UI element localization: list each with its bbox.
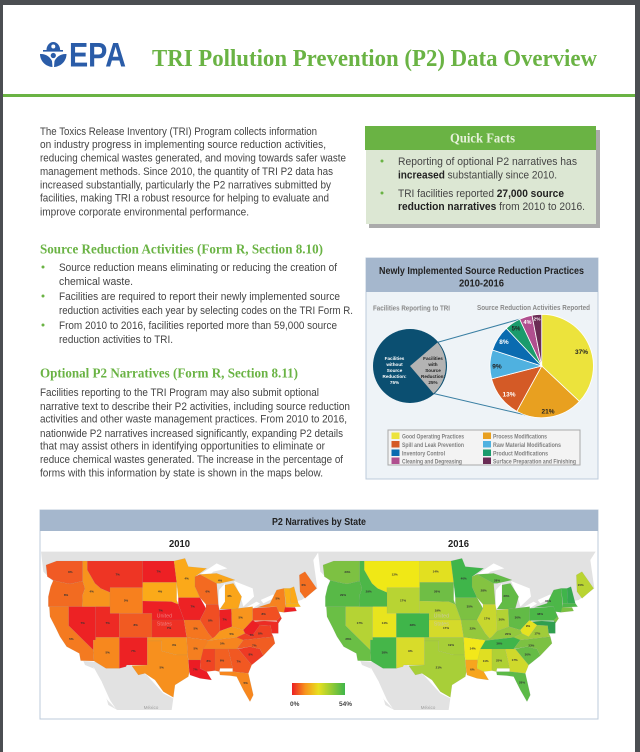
state labels 2016: 17% <box>400 598 406 602</box>
state labels 2016: 9% <box>408 649 413 653</box>
intro text block: increased substantially, particularly the P2 narratives submitted by <box>40 180 331 192</box>
bullet list: source reduction: Source reduction means eliminating or reducing the creation of <box>59 262 338 274</box>
state labels 2010: 4% <box>158 589 162 593</box>
state labels 2010: 5% <box>69 637 74 641</box>
bullet list: source reduction: reduction activities to TRI. <box>59 334 173 346</box>
state labels 2016: 17% <box>512 658 518 662</box>
state labels 2016: 29% <box>366 590 372 594</box>
text block: optional P2 narratives: activities and other waste management practices. From 2010 to 2016, <box>40 414 347 426</box>
map: 2016: States <box>434 621 449 627</box>
state labels 2016: 30% <box>503 594 510 598</box>
state labels 2016: 31% <box>545 599 551 603</box>
pie labels: 37% <box>575 349 588 356</box>
state labels 2010: 5% <box>194 646 198 650</box>
pie labels <box>492 316 588 416</box>
pie labels: 9% <box>492 364 502 370</box>
connector lines <box>434 318 530 416</box>
chart legend: Inventory Control <box>402 450 445 458</box>
text block: optional P2 narratives: Facilities reporting to the TRI Program may also submit optional <box>40 387 319 399</box>
title: TRI Pollution Prevention (P2) Data Overview <box>152 46 598 72</box>
text block: optional P2 narratives <box>40 387 350 480</box>
subheading: facilities: Facilities Reporting to TRI <box>373 306 450 312</box>
pie labels: 8% <box>499 339 509 346</box>
state labels 2010: 7% <box>131 649 136 653</box>
state labels 2010: 7% <box>191 605 195 609</box>
chart legend <box>388 430 580 466</box>
intro text block: improve corporate environmental performance. <box>40 206 249 218</box>
heading: optional P2 narratives: Optional P2 Narratives (Form R, Section 8.11) <box>40 366 298 380</box>
pie labels: 4% <box>524 320 532 326</box>
chart legend: Cleaning and Degreasing <box>402 458 462 466</box>
state labels 2016: 20% <box>499 618 505 622</box>
text block: optional P2 narratives: nationwide P2 narratives increased significantly, expanding P2 details <box>40 428 343 440</box>
year label 2016: 2016 <box>448 538 469 550</box>
state labels 2010: 7% <box>159 608 163 612</box>
panel: quick facts: TRI facilities reported 27,000 source <box>398 188 564 200</box>
chart legend: Spill and Leak Prevention <box>402 442 464 449</box>
intro text block: on industry progress in implementing source reduction activities, <box>40 139 326 151</box>
state labels 2016: 17% <box>357 621 363 625</box>
heading: source reduction activities: Source Reduction Activities (Form R, Section 8.10) <box>40 242 323 256</box>
state labels 2016: 38% <box>382 650 388 654</box>
pie labels: 5% <box>512 326 521 332</box>
state labels 2010: 8% <box>258 632 263 636</box>
pie: facilities: Reduction: <box>421 374 445 379</box>
panel: quick facts: Quick Facts <box>450 132 515 146</box>
state labels 2016: 17% <box>484 616 490 620</box>
map: 2010: States <box>157 621 172 627</box>
subheading: activities: Source Reduction Activities Reported <box>477 305 590 312</box>
bullet list: source reduction: Facilities are required to report their newly implemented source <box>59 291 340 303</box>
state labels 2010: 7% <box>157 569 161 573</box>
state labels 2016: 19% <box>435 608 441 612</box>
intro text block: management methods. Since 2010, the quantity of TRI P2 data has <box>40 166 333 178</box>
panel: quick facts <box>365 126 600 228</box>
state labels 2016: 9% <box>526 624 530 628</box>
chart legend: Product Modifications <box>493 450 548 458</box>
map colour legend <box>290 683 352 708</box>
chart title: 2010-2016 <box>459 278 504 290</box>
intro text block: The Toxics Release Inventory (TRI) Program collects information <box>40 126 317 138</box>
state labels 2010: 8% <box>64 593 68 597</box>
pie: facilities: 25% <box>428 380 438 385</box>
state labels 2010: 7% <box>167 626 171 630</box>
state labels 2010: 8% <box>262 612 266 616</box>
pie: facilities: 75% <box>390 380 399 385</box>
state labels 2010: 5% <box>239 615 243 619</box>
chart legend: Raw Material Modifications <box>493 442 561 449</box>
state labels 2016: 29% <box>340 593 346 597</box>
state labels 2010: 5% <box>124 598 128 602</box>
pie labels: 13% <box>502 392 516 398</box>
pie: facilities: without <box>385 362 403 367</box>
state labels 2016: 40% <box>461 577 467 581</box>
state labels 2016: 30% <box>525 652 531 656</box>
pie labels: 21% <box>541 408 555 416</box>
state labels 2016: 11% <box>483 659 489 663</box>
state labels 2010: 8% <box>207 659 211 663</box>
state labels 2010: 7% <box>81 621 85 625</box>
panel: P2 narratives by state <box>40 510 598 719</box>
state labels 2016: 22% <box>470 627 476 631</box>
pie: facilities: Facilities <box>423 356 443 361</box>
state labels 2010: 7% <box>106 621 110 625</box>
state labels 2016: 26% <box>345 637 352 641</box>
state labels 2016: 12% <box>392 572 398 576</box>
chart legend: Good Operating Practices <box>402 434 464 440</box>
state labels 2010: 6% <box>301 583 306 587</box>
pie: activities <box>490 314 593 418</box>
state labels 2016: 28% <box>494 578 500 582</box>
panel: quick facts: Reporting of optional P2 narratives has <box>398 156 577 168</box>
state labels 2016: 38% <box>537 612 543 616</box>
text block: optional P2 narratives: that may assist others in identifying opportunities to eliminate or <box>40 440 325 452</box>
intro text block: facilities, making TRI a robust resource for helping to evaluate and <box>40 192 329 204</box>
pie labels: 2% <box>534 316 541 322</box>
state labels 2010: 5% <box>244 681 248 685</box>
map: 2016: United <box>434 614 449 620</box>
state labels 2010: 8% <box>249 652 253 656</box>
state labels 2016: 38% <box>410 623 416 627</box>
map: 2016: México <box>421 705 436 710</box>
state labels 2010: 7% <box>116 572 120 576</box>
state labels 2016: 15% <box>578 583 584 587</box>
state labels 2016: 14% <box>433 569 439 573</box>
map: 2010: México <box>144 705 159 710</box>
logo: EPA: EPA <box>69 36 126 74</box>
pie: facilities: Source <box>425 368 441 373</box>
text block: optional P2 narratives: reduce chemical wastes generated. The increase in the percentage of <box>40 454 344 466</box>
state labels 2016: 33% <box>344 570 351 574</box>
state labels 2010: 4% <box>227 594 232 598</box>
text block: optional P2 narratives: narrative text to describe their P2 activities, including source reduction <box>40 401 350 413</box>
state labels 2010: 8% <box>134 623 138 627</box>
state labels 2016: 30% <box>515 615 521 619</box>
state labels 2010: 6% <box>220 658 224 662</box>
map: 2016 <box>318 552 596 710</box>
state labels 2016: 36% <box>496 642 503 646</box>
state labels 2010: 5% <box>194 627 198 631</box>
state labels 2010: 5% <box>220 642 225 646</box>
state labels 2010: 7% <box>223 618 227 622</box>
state labels 2016: 35% <box>467 605 473 609</box>
state labels 2010: 8% <box>208 619 213 623</box>
state labels 2016: 17% <box>534 632 541 636</box>
state labels 2010: 8% <box>68 570 73 574</box>
state labels 2010 <box>64 569 306 685</box>
state labels 2010: 7% <box>250 633 254 637</box>
state labels 2016: 25% <box>496 658 502 662</box>
state labels 2010: 7% <box>193 668 198 672</box>
state labels 2010: 5% <box>160 665 164 669</box>
state labels 2016: 26% <box>434 589 440 593</box>
text block: optional P2 narratives: forms with this information by state is shown in the maps below. <box>40 468 323 480</box>
chart title: Newly Implemented Source Reduction Practices <box>379 265 584 277</box>
panel: source reduction chart <box>366 258 598 479</box>
state labels 2010: 4% <box>185 577 189 581</box>
state labels 2010: 4% <box>172 643 176 647</box>
state labels 2016 <box>340 569 584 684</box>
bullet list: source reduction: chemical waste. <box>59 276 133 288</box>
bullet list: source reduction <box>42 262 353 346</box>
state labels 2010: 5% <box>230 632 234 636</box>
map: 2010 <box>41 552 319 710</box>
map colour legend: 0% <box>290 701 300 708</box>
state labels 2016: 20% <box>505 632 511 636</box>
states 2010 <box>46 558 317 702</box>
bullet list: source reduction: reduction activities each year by selecting codes on the TRI Form R. <box>59 305 353 317</box>
pie: facilities <box>373 329 447 403</box>
state labels 2016: 14% <box>382 621 388 625</box>
map colour legend: 54% <box>339 701 352 708</box>
intro text block: reducing chemical wastes generated, and moving towards safer waste <box>40 152 346 164</box>
state labels 2016: 19% <box>448 643 454 647</box>
chart legend: Process Modifications <box>493 434 547 440</box>
state labels 2016: 17% <box>443 626 449 630</box>
bullet list: source reduction: From 2010 to 2016, facilities reported more than 59,000 source <box>59 320 337 332</box>
states 2016 <box>323 558 594 702</box>
state labels 2016: 21% <box>436 665 442 669</box>
state labels 2010: 7% <box>252 643 257 647</box>
state labels 2010: 5% <box>106 650 110 654</box>
state labels 2016: 28% <box>519 680 525 684</box>
state labels 2010: 5% <box>276 596 280 600</box>
pie: facilities: Reduction: <box>382 374 407 379</box>
state labels 2016: 33% <box>528 643 535 647</box>
state labels 2016: 14% <box>470 646 476 650</box>
state labels 2016: 6% <box>470 668 475 672</box>
state labels 2010: 4% <box>218 578 222 582</box>
panel title: P2 Narratives by State <box>272 517 366 528</box>
state labels 2016: 28% <box>481 588 487 592</box>
chart legend: Surface Preparation and Finishing <box>493 458 576 466</box>
panel: quick facts: increased substantially since 2010. <box>398 170 557 182</box>
panel: quick facts: reduction narratives from 2010 to 2016. <box>398 201 585 213</box>
state labels 2010: 4% <box>90 590 94 594</box>
logo: EPA <box>40 36 126 74</box>
intro text block <box>40 126 346 218</box>
year label 2010: 2010 <box>169 538 190 550</box>
pie: facilities: Source <box>387 368 403 373</box>
pie: facilities: with <box>427 362 438 367</box>
state labels 2010: 6% <box>206 590 210 594</box>
chart title <box>379 265 584 290</box>
pie: facilities: Facilities <box>385 356 405 361</box>
state labels 2010: 7% <box>237 659 241 663</box>
map: 2010: United <box>157 614 172 620</box>
